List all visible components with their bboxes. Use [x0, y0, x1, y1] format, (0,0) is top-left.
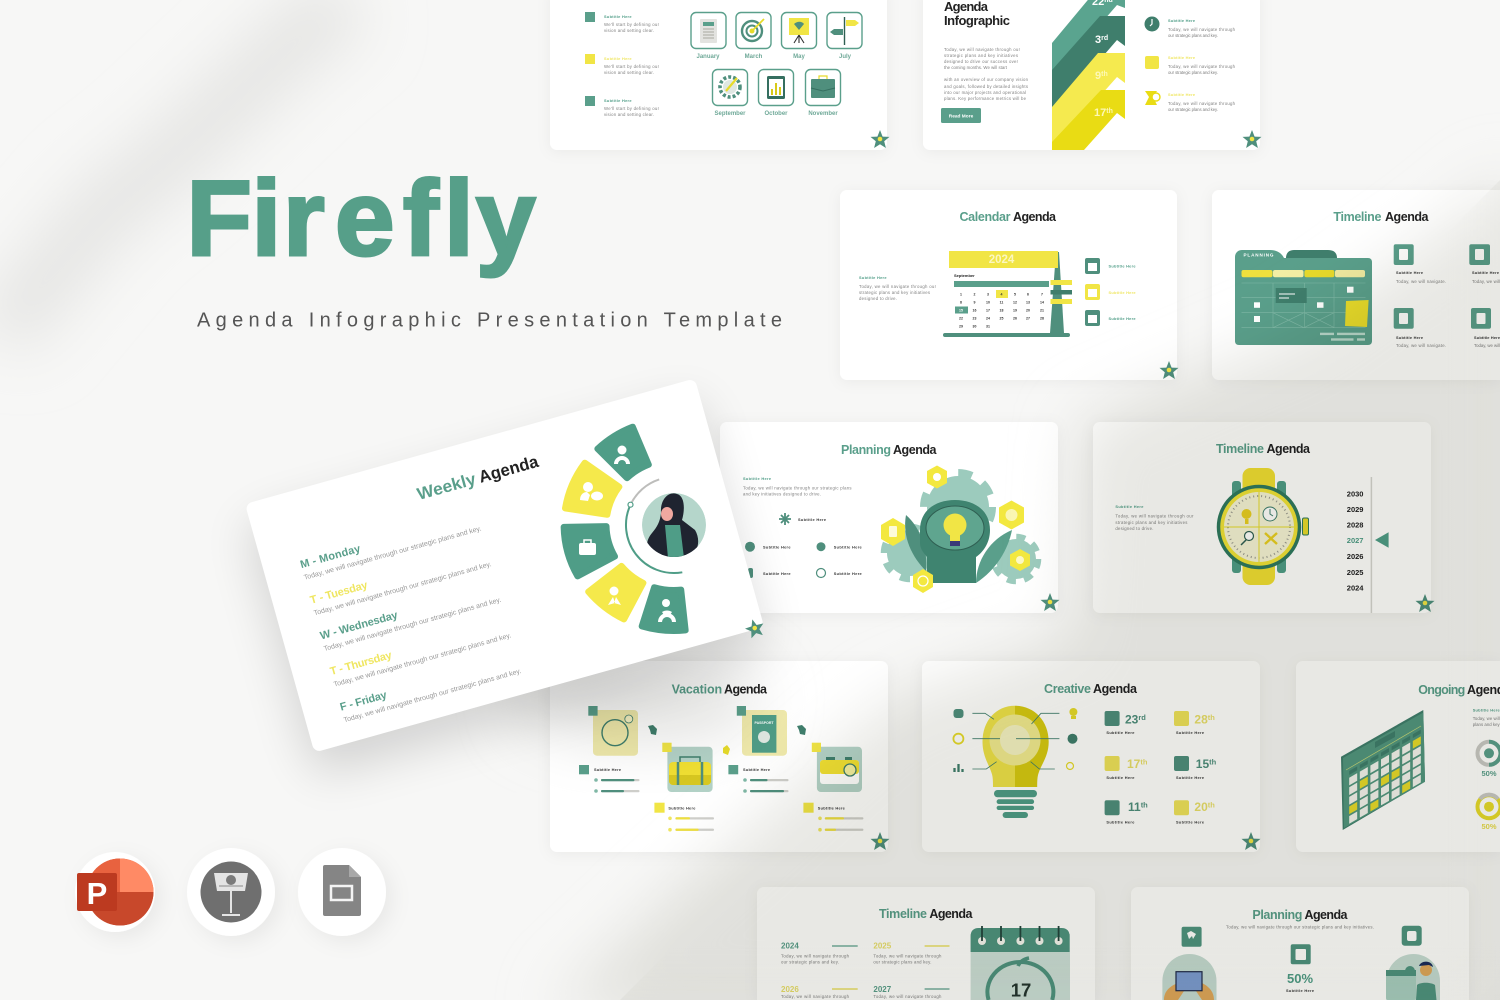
description: the coming months. We will start	[944, 65, 1008, 70]
stat tiles: Subtitle Here	[1106, 730, 1135, 735]
page badge	[1242, 832, 1260, 850]
featured card: weekly agenda	[241, 378, 770, 775]
heading: Agenda	[1266, 442, 1311, 456]
arrow legend: our strategic plans and key.	[1168, 33, 1218, 38]
description: and key initiatives designed to drive.	[743, 492, 821, 496]
description: Today, we will	[1473, 716, 1500, 721]
arrow legend: our strategic plans and key.	[1168, 107, 1218, 112]
desk calendar: 29	[959, 324, 963, 328]
month tiles: November	[808, 111, 838, 117]
heading: Planning	[841, 443, 891, 457]
year list: 2026	[1347, 552, 1363, 561]
slide card: timeline agenda with watch	[1093, 422, 1434, 613]
subheading: Today, we will navigate through our strategic plans and key initiatives.	[1226, 924, 1374, 930]
year entries: 2025	[873, 942, 892, 950]
heading	[415, 452, 541, 504]
progress arc	[626, 479, 682, 573]
year entries: 2024	[781, 942, 799, 950]
description: strategic plans and key initiatives	[1115, 520, 1187, 525]
arrow legend: Today, we will navigate through	[1168, 101, 1236, 106]
year entries: Today, we will navigate through	[873, 954, 942, 958]
description: designed to drive our success over	[944, 59, 1019, 64]
person illustration	[1386, 954, 1440, 1000]
desk calendar: 11	[1000, 300, 1003, 304]
icon: PowerPoint: P	[87, 876, 107, 911]
month tiles: March	[745, 54, 763, 60]
planning items: Subtitle Here	[798, 517, 827, 522]
button: Read More	[949, 114, 974, 120]
day list: Today, we will navigate through our strategic plans and key.	[323, 597, 502, 653]
vacation tiles: PASSPORT	[754, 721, 774, 725]
desk calendar: 2	[974, 292, 976, 296]
stat tiles: th	[1209, 758, 1217, 766]
progress rows: Subtitle Here	[594, 767, 622, 772]
year entries	[781, 942, 950, 999]
day list: F - Friday	[339, 689, 389, 714]
description: with an overview of our company vision	[944, 77, 1029, 82]
description: Subtitle Here	[1473, 708, 1500, 712]
desk calendar: 1	[960, 292, 962, 296]
desk calendar: 26	[1013, 316, 1017, 320]
timeline items: Subtitle Here	[1472, 270, 1500, 275]
heading: Agenda	[477, 452, 541, 487]
arrow legend: Subtitle Here	[1168, 55, 1196, 60]
desk calendar: 24	[986, 316, 990, 320]
heading	[879, 907, 973, 921]
description: designed to drive.	[859, 296, 897, 301]
stat tiles: Subtitle Here	[1106, 775, 1135, 780]
desk calendar: 14	[1040, 300, 1044, 304]
heading: Timeline	[1216, 442, 1264, 456]
percent stat	[1286, 971, 1315, 993]
timeline items: Today, we will navigate.	[1396, 343, 1446, 348]
desk calendar: 4	[1001, 292, 1003, 296]
timeline items: Subtitle Here	[1396, 270, 1424, 275]
description: Today, we will navigate through our	[944, 47, 1021, 52]
heading	[960, 210, 1057, 224]
progress rows: Subtitle Here	[818, 806, 846, 810]
day list: T - Tuesday	[309, 579, 370, 607]
desk calendar: 22	[959, 316, 963, 320]
progress rows: Subtitle Here	[668, 806, 696, 810]
heading: Timeline	[1333, 210, 1381, 224]
desk calendar: 9	[974, 300, 976, 304]
planning folder	[1235, 250, 1372, 345]
stat tiles: th	[1208, 800, 1215, 810]
day list: T - Thursday	[329, 649, 394, 678]
heading: Agenda	[893, 443, 938, 457]
desk calendar: 7	[1041, 292, 1043, 296]
slide card: bottom timeline agenda	[757, 887, 1095, 1000]
percent stat: 50%	[1287, 971, 1313, 986]
stat tiles: 17	[1127, 757, 1140, 771]
step list: vision and setting clear.	[604, 112, 654, 117]
desk calendar: 20	[1026, 308, 1030, 312]
timeline items: Subtitle Here	[1474, 335, 1500, 340]
description: plans. Key performance metrics will be	[944, 96, 1027, 101]
arrow stack	[1052, 0, 1125, 150]
timeline items: Today, we will navigate.	[1396, 279, 1446, 284]
step list: We'll start by defining our	[604, 22, 660, 27]
arrow stack: th	[1106, 108, 1113, 115]
desk calendar: September	[954, 273, 975, 278]
desk calendar: 19	[1013, 308, 1017, 312]
day list: M - Monday	[299, 543, 363, 571]
stat tiles: th	[1208, 713, 1215, 722]
planning folder: PLANNING	[1244, 252, 1274, 258]
month tiles: September	[714, 111, 746, 117]
arrow legend: Today, we will navigate through	[1168, 64, 1236, 69]
icon: Google Slides	[298, 848, 386, 936]
year entries: Today, we will navigate through	[781, 954, 850, 958]
arrow stack: th	[1101, 71, 1108, 78]
stat tiles: 23	[1125, 712, 1138, 726]
arrow legend: Subtitle Here	[1168, 92, 1196, 97]
day list: W - Wednesday	[319, 609, 400, 642]
progress rings	[1478, 742, 1500, 831]
calendar legend	[1085, 258, 1136, 326]
day list: Today, we will navigate through our strategic plans and key.	[333, 632, 512, 689]
description: designed to drive.	[1115, 526, 1153, 531]
desk calendar: 21	[1040, 308, 1044, 312]
day list: Today, we will navigate through our strategic plans and key.	[303, 525, 482, 582]
isometric calendar	[1341, 710, 1425, 830]
page badge	[1160, 361, 1178, 379]
vacation tiles	[588, 706, 862, 792]
arrow legend: Today, we will navigate through	[1168, 27, 1236, 32]
desk calendar: 17	[986, 308, 990, 312]
stat tiles: th	[1141, 800, 1148, 810]
slide card: bottom planning agenda	[1131, 887, 1469, 1000]
month tiles: October	[764, 111, 788, 117]
year list: 2029	[1347, 505, 1363, 514]
heading: Vacation	[672, 682, 722, 696]
progress rings: 50%	[1481, 769, 1497, 778]
progress rows	[579, 765, 863, 832]
desk calendar: 25	[1000, 316, 1003, 320]
step list: We'll start by defining our	[604, 106, 660, 111]
subtitle: Agenda Infographic Presentation Template	[197, 310, 782, 332]
day list	[299, 510, 522, 724]
stat tiles: Subtitle Here	[1176, 775, 1205, 780]
year entries: Today, we will navigate through	[873, 994, 942, 999]
calendar legend: Subtitle Here	[1108, 264, 1136, 268]
heading: Weekly	[415, 469, 478, 504]
desk calendar: 16	[973, 308, 976, 312]
arrow legend: Subtitle Here	[1168, 18, 1196, 23]
description: Subtitle Here	[743, 476, 772, 481]
calendar legend: Subtitle Here	[1108, 316, 1136, 321]
progress rows: Subtitle Here	[743, 767, 771, 772]
slide card: ongoing agenda	[1296, 661, 1500, 852]
heading	[1252, 908, 1349, 922]
head and gears illustration	[881, 466, 1038, 593]
day list: Today, we will navigate through our strategic plans and key.	[313, 561, 492, 617]
heading	[672, 682, 768, 696]
step list: Subtitle Here	[604, 98, 632, 103]
arrow stack: 17	[1094, 107, 1106, 119]
percent stat: Subtitle Here	[1286, 988, 1315, 993]
page badge	[743, 617, 766, 639]
desk calendar	[943, 251, 1072, 337]
desk calendar: 28	[1040, 316, 1044, 320]
desk calendar: 27	[1026, 316, 1030, 320]
step list: Subtitle Here	[604, 56, 632, 61]
description: and goals, followed by detailed insights	[944, 84, 1028, 89]
planning items: Subtitle Here	[834, 571, 863, 576]
desk calendar: 2024	[989, 254, 1015, 266]
heading: Agenda	[1304, 908, 1349, 922]
heading: Creative	[1044, 682, 1091, 696]
step list: vision and setting clear.	[604, 28, 654, 33]
year list: 2030	[1347, 489, 1363, 498]
heading: Ongoing	[1418, 683, 1465, 697]
heading: Agenda	[724, 682, 768, 696]
planning items: Subtitle Here	[763, 545, 791, 550]
day list: Today, we will navigate through our strategic plans and key.	[343, 668, 522, 724]
page badge	[870, 832, 890, 850]
year entries: 2027	[873, 985, 892, 994]
planning items: Subtitle Here	[763, 571, 791, 576]
stat tiles: 20	[1194, 800, 1208, 814]
bulb side icons	[953, 708, 1078, 772]
desk calendar: 8	[960, 300, 962, 304]
main title: Firefly	[186, 158, 536, 278]
desk calendar: 30	[973, 324, 976, 328]
step list	[585, 12, 660, 117]
slide card: creative agenda	[922, 661, 1260, 852]
timeline items	[1394, 244, 1500, 348]
desk calendar: 15	[959, 308, 963, 312]
button	[941, 108, 981, 123]
heading	[1044, 682, 1138, 696]
heading	[841, 443, 938, 457]
description: strategic plans and key initiatives	[944, 53, 1018, 58]
year entries: our strategic plans and key.	[781, 960, 839, 964]
desk calendar: 13	[1026, 300, 1030, 304]
desk calendar: 23	[973, 316, 976, 320]
timeline items: Today, we will	[1472, 279, 1500, 284]
heading: Planning	[1252, 908, 1302, 922]
page badge	[1242, 130, 1262, 148]
desk calendar: 6	[1027, 292, 1029, 296]
desk calendar: 12	[1013, 300, 1017, 304]
light bulb	[972, 706, 1059, 818]
path arrows	[648, 725, 806, 755]
progress rings: 50%	[1481, 822, 1497, 831]
apple calendar	[971, 926, 1070, 1000]
year pointer	[1375, 532, 1389, 548]
stat tiles: 15	[1196, 757, 1209, 771]
month tiles: July	[839, 54, 852, 60]
timeline items: Today, we will	[1474, 343, 1500, 348]
year entries: Today, we will navigate through	[781, 994, 850, 999]
avatar	[642, 493, 706, 558]
heading: Infographic	[944, 13, 1010, 28]
page badge	[1416, 594, 1434, 612]
slide card: calendar agenda	[840, 190, 1178, 380]
agenda icons	[1182, 926, 1422, 964]
heading	[1333, 210, 1430, 224]
year entries: 2026	[781, 985, 799, 994]
heading: Timeline	[879, 907, 927, 921]
icon: PowerPoint	[75, 852, 155, 932]
description	[1473, 708, 1500, 727]
description: Today, we will navigate through our strategic plans	[743, 486, 852, 490]
planning items: Subtitle Here	[834, 545, 863, 550]
slide card: timeline agenda with folder	[1212, 190, 1500, 380]
stat tiles: rd	[1138, 713, 1146, 722]
description	[1115, 504, 1194, 531]
page badge	[1040, 593, 1060, 611]
heading	[1216, 442, 1311, 456]
month tiles: May	[793, 54, 805, 60]
slide card: planning agenda with gears	[720, 422, 1060, 613]
month tiles: January	[696, 54, 720, 60]
description: plans and key	[1473, 722, 1500, 727]
description	[859, 275, 937, 301]
year entries: our strategic plans and key.	[873, 960, 931, 964]
slide card: agenda infographic	[923, 0, 1262, 150]
desk calendar: 10	[986, 300, 990, 304]
year list: 2024	[1347, 584, 1364, 592]
stat tiles: th	[1140, 758, 1148, 766]
heading: Agenda	[1093, 682, 1138, 696]
description	[944, 47, 1029, 101]
description: Today, we will navigate through our	[859, 284, 937, 289]
slide card: steps and months	[550, 0, 890, 150]
wheel icons	[579, 446, 676, 622]
year list: 2028	[1347, 520, 1363, 530]
description: strategic plans and key initiatives	[859, 290, 930, 295]
desk calendar: 31	[986, 324, 990, 328]
description	[743, 476, 852, 496]
heading: Agenda	[1385, 210, 1430, 224]
heading: Agenda	[929, 907, 973, 921]
description: Subtitle Here	[859, 275, 887, 280]
arrow stack: 3	[1095, 34, 1101, 46]
timeline items: Subtitle Here	[1396, 335, 1424, 340]
description: Today, we will navigate through our	[1115, 514, 1194, 518]
desk calendar: 3	[987, 292, 989, 296]
slide card: vacation agenda	[550, 661, 890, 852]
heading	[944, 0, 1010, 28]
wristwatch	[1218, 468, 1308, 585]
calendar legend: Subtitle Here	[1108, 290, 1136, 295]
year list	[1347, 489, 1364, 592]
desk calendar: 5	[1014, 292, 1016, 296]
apple calendar: 17	[1011, 980, 1031, 1000]
stat tiles: Subtitle Here	[1106, 820, 1135, 824]
desk calendar: 18	[1000, 308, 1003, 312]
step list: vision and setting clear.	[604, 70, 654, 75]
heading: Calendar	[960, 210, 1011, 224]
arrow legend: our strategic plans and key.	[1168, 70, 1218, 75]
stat tiles: Subtitle Here	[1176, 820, 1205, 824]
description: into our major projects and operational	[944, 90, 1026, 95]
stat tiles: Subtitle Here	[1176, 730, 1205, 735]
year list: 2027	[1347, 536, 1363, 545]
icon: Keynote	[187, 848, 275, 936]
month tiles	[691, 12, 862, 117]
circular day wheel with avatar	[564, 427, 706, 631]
heading	[1418, 683, 1500, 697]
year list: 2025	[1347, 568, 1363, 577]
tablet illustration	[1162, 954, 1216, 1000]
heading: Agenda	[1013, 210, 1057, 224]
stat tiles: 28	[1194, 712, 1208, 726]
stat tiles: 11	[1128, 800, 1141, 814]
stat tiles	[1105, 711, 1217, 824]
ambient shading over slides	[550, 170, 1500, 1000]
arrow legend	[1144, 16, 1236, 112]
description: Subtitle Here	[1115, 504, 1144, 509]
arrow stack: 9	[1095, 70, 1101, 82]
arrow stack: rd	[1101, 35, 1108, 42]
step list: Subtitle Here	[604, 14, 632, 19]
step list: We'll start by defining our	[604, 64, 660, 69]
planning items	[745, 513, 863, 578]
page badge	[870, 130, 890, 148]
